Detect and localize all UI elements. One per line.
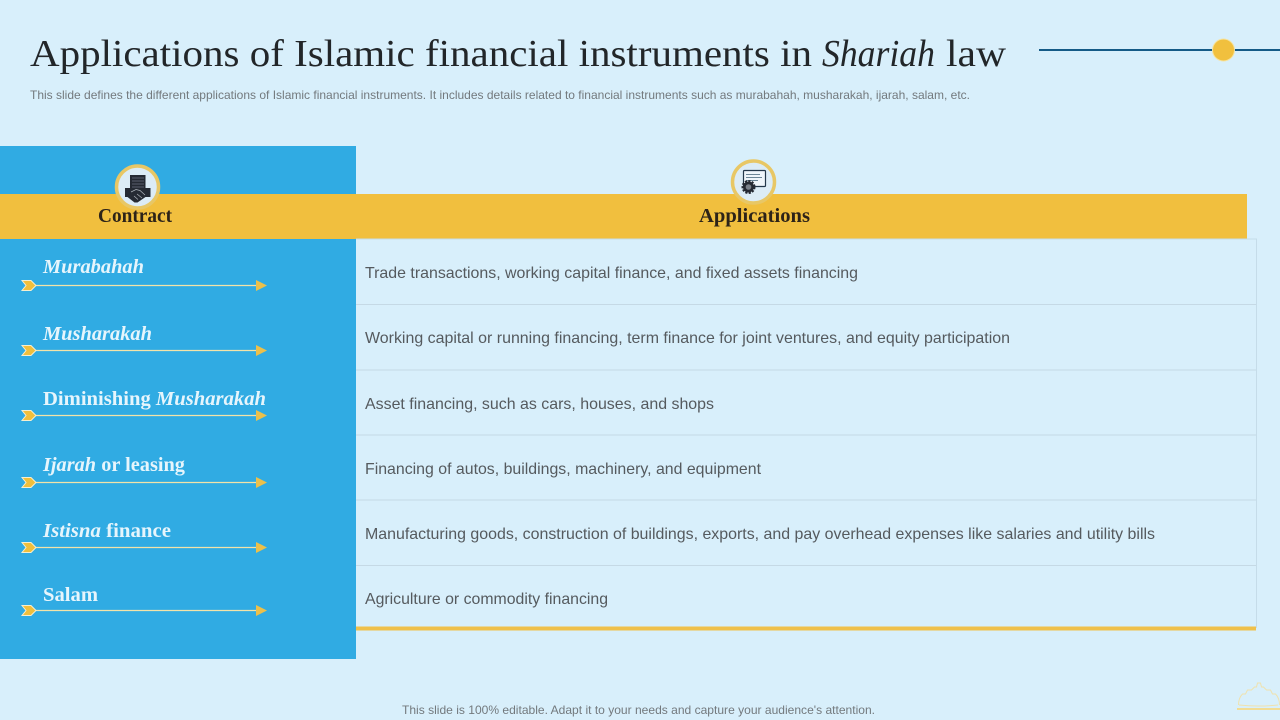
row 1 text: Trade transactions, working capital finance, and fixed assets financing [365,265,858,282]
contract: Istisna finance [22,520,267,553]
row 3 text: Asset financing, such as cars, houses, and shops [365,396,714,413]
header band [0,194,1247,239]
row 4 text: Financing of autos, buildings, machinery, and equipment [365,461,762,478]
contract: Murabahah [22,256,267,291]
footer note: This slide is 100% editable. Adapt it to your needs and capture your audience's attention. [402,703,875,717]
title: Applications of Islamic financial instruments in [30,33,812,75]
title: Shariah [822,33,935,75]
panel: contract column background [0,146,356,659]
contract: Salam [22,584,267,616]
heading: Applications: Applications [699,205,810,227]
contract: Musharakah [22,323,267,356]
contract: Ijarah or leasing [22,454,267,488]
contract: Ijarah or leasing: Ijarah or leasing [42,454,185,476]
contract: Diminishing Musharakah [22,388,267,421]
contract: Murabahah: Murabahah [42,256,144,278]
row 6 text: Agriculture or commodity financing [365,591,608,608]
title: law [946,33,1007,75]
contract: Istisna finance: Istisna finance [42,520,171,542]
contract: Musharakah: Musharakah [42,323,152,345]
row 5 text: Manufacturing goods, construction of buildings, exports, and pay overhead expenses like salaries and utility bills [365,526,1155,543]
subtitle: This slide defines the different applications of Islamic financial instruments. It includes details related to financial instruments such as murabahah, musharakah, ijarah, salam, etc. [30,88,970,102]
icon: contract handshake [116,166,158,208]
table: applications rows [356,239,1256,630]
decorative line with yellow dot [1039,39,1280,61]
icon: watermark gear [1237,683,1280,709]
contract: Salam: Salam [43,584,98,606]
heading: Contract: Contract [98,205,172,227]
row 2 text: Working capital or running financing, term finance for joint ventures, and equity participation [365,330,1010,347]
contract: Diminishing Musharakah: Diminishing Musharakah [43,388,266,410]
icon: applications certificate and gear [732,161,774,203]
